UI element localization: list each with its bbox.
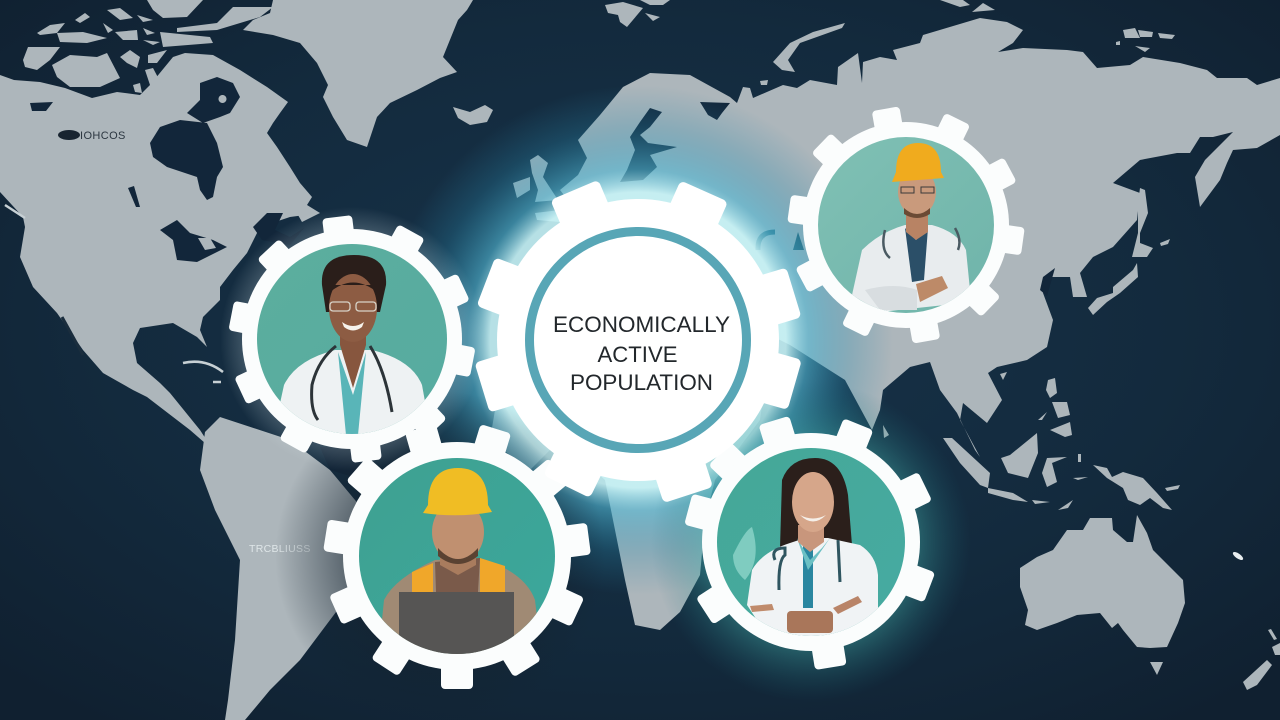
map: Baja channel [62, 317, 83, 355]
title text: ACTIVE [598, 342, 678, 367]
title text: ECONOMICALLY [553, 312, 730, 337]
gear: bottom right doctor [684, 416, 935, 670]
map: Caspian sea [793, 232, 804, 250]
person: worker with laptop [378, 468, 542, 660]
teal ring [530, 232, 746, 448]
map: Southeast Asia islands [883, 372, 1088, 510]
map: Australia [1020, 515, 1185, 648]
title text: POPULATION [570, 370, 713, 395]
person: woman doctor [280, 255, 425, 434]
gear: left doctor [220, 207, 484, 471]
label: map text north: IOHCOS [80, 130, 126, 142]
map: New Caledonia [1232, 551, 1244, 561]
map: North America [0, 53, 320, 450]
map: New Guinea [1093, 465, 1180, 510]
map: UK and Ireland [513, 155, 560, 222]
map: Sakhalin and Japan [1088, 188, 1170, 315]
label: map text north [58, 130, 126, 142]
map: Tasmania and New Zealand [1150, 629, 1280, 690]
map: Russian Arctic islands [605, 0, 1175, 85]
person: man with hard hat [852, 143, 970, 312]
map: South America [200, 417, 380, 720]
gear: top right doctor with hard hat [787, 106, 1025, 344]
shade around lower left gear [275, 391, 605, 720]
glow around centre gear [383, 85, 893, 595]
map: Caribbean islands and coast lines [5, 205, 223, 382]
map: Black and Caspian seas [758, 232, 775, 250]
person: woman doctor with arms crossed [733, 458, 878, 640]
map: Great Lakes detail [198, 95, 320, 250]
title text [553, 312, 730, 395]
map: Eurasia [560, 18, 1280, 457]
map: inland seas [30, 77, 1055, 482]
glow around lower right gear [651, 382, 971, 702]
map: Iceland [453, 105, 493, 125]
map: Africa [490, 300, 770, 630]
label: map text south: TRCBLIUSS [249, 543, 311, 555]
gear: bottom left worker [323, 424, 591, 689]
map: Greenland [243, 0, 473, 147]
map: Arctic islands [23, 0, 273, 93]
gear: centre [475, 180, 802, 503]
